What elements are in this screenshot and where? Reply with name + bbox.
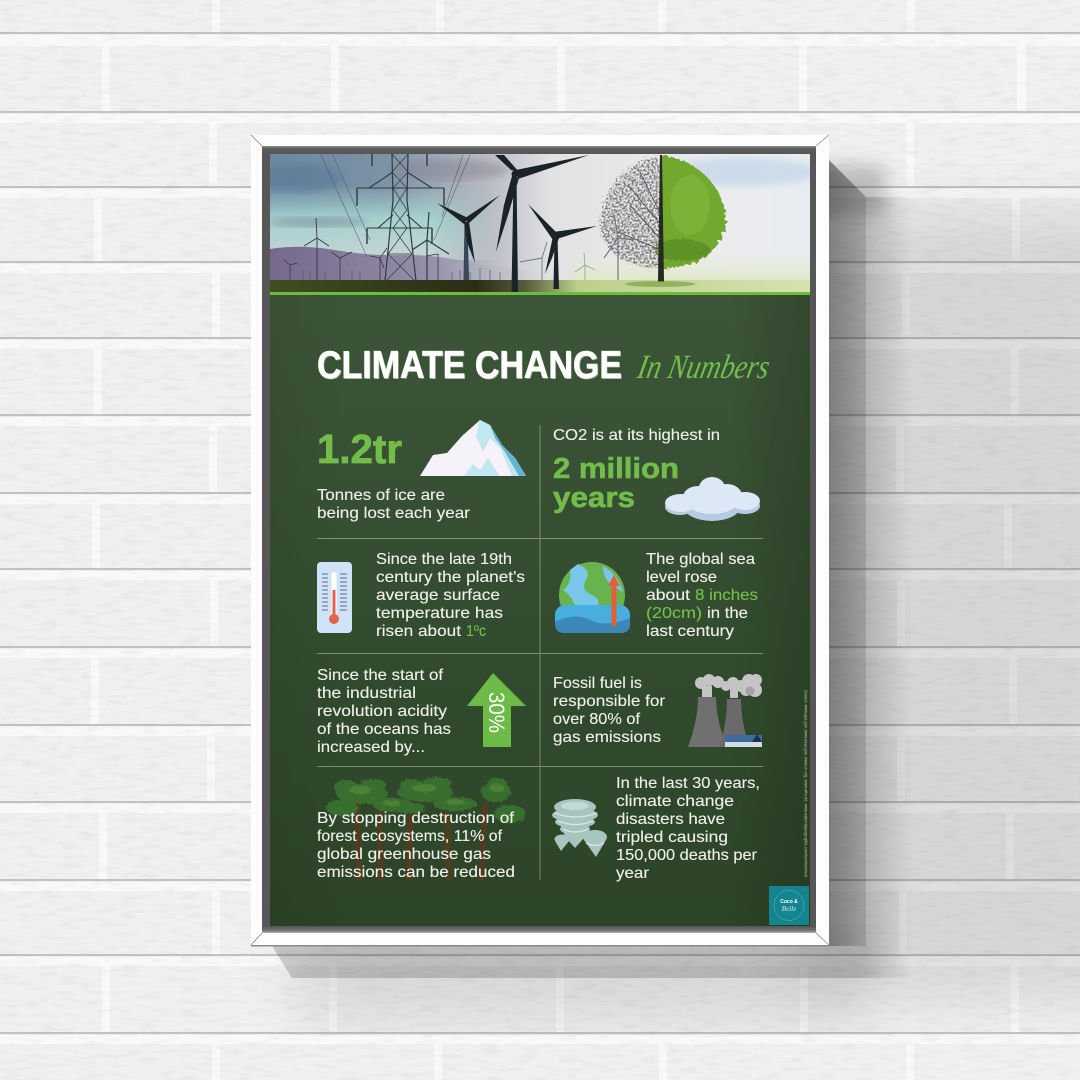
stat: sea level rise [555, 551, 758, 640]
stat: ocean acidity [317, 667, 526, 756]
stat: climate disasters: tripled causing [616, 829, 728, 846]
stat: forest ecosystems: By stopping destruction of [317, 810, 515, 827]
stat: climate disasters [552, 775, 760, 882]
icon: power plant [688, 674, 762, 747]
stat: forest ecosystems: forest ecosystems, 11% of [317, 828, 503, 845]
stat: planet temperature risen: Since the late 19th [376, 551, 512, 568]
stat: ocean acidity: revolution acidity [317, 703, 447, 720]
stat: climate disasters: 150,000 deaths per [616, 847, 757, 864]
stat: sea level rise: The global sea [646, 551, 755, 568]
background turbines [284, 212, 634, 280]
stat: 1.2tr tonnes of ice: Tonnes of ice are [317, 487, 445, 504]
stat: planet temperature risen [317, 551, 525, 640]
stat: ocean acidity: of the oceans has [317, 721, 451, 738]
stat: ocean acidity: Since the start of [317, 667, 444, 684]
logo: Coco and Belle [769, 886, 809, 925]
stat: ocean acidity: the industrial [317, 685, 416, 702]
green line under hero image [270, 292, 810, 295]
stat: ocean acidity: increased by... [317, 739, 425, 756]
stat: 1.2tr tonnes of ice: 1.2tr [317, 426, 402, 472]
stat: sea level rise: last century [646, 623, 734, 640]
stat: sea level rise: about [646, 587, 691, 604]
logo: Coco and Belle: Coco & [780, 899, 798, 905]
stat: planet temperature risen: 1ºc [466, 623, 486, 640]
stat: sea level rise: (20cm) [646, 605, 702, 622]
stat: fossil fuel [553, 674, 762, 747]
stat: forest ecosystems [317, 777, 526, 881]
main turbines [437, 155, 597, 292]
trees half bare [600, 155, 726, 287]
stat: fossil fuel: Fossil fuel is [553, 675, 642, 692]
stat: planet temperature risen: century the planet's [376, 569, 525, 586]
pylon [357, 154, 444, 281]
stat: CO2 highest in 2 million years: 2 million [553, 453, 679, 485]
stat: forest ecosystems: emissions can be reduced [317, 864, 515, 881]
icon: green up arrow 30% [467, 673, 526, 747]
stat: forest ecosystems: global greenhouse gas [317, 846, 491, 863]
stat: planet temperature risen: risen about [376, 623, 462, 640]
stat: fossil fuel: gas emissions [553, 729, 661, 746]
wires [321, 155, 470, 257]
stat: CO2 highest in 2 million years: years [553, 482, 635, 514]
icon: iceberg mountain [420, 420, 526, 476]
poster frame [251, 135, 829, 946]
stat: 1.2tr tonnes of ice: being lost each year [317, 505, 470, 522]
stat: 1.2tr tonnes of ice [317, 420, 526, 522]
stat: climate disasters: In the last 30 years, [616, 775, 760, 792]
source note: Source: www.epa.gov, www.nasa.gov, www.un.org, www.who.int, www.nationalgeographic.com/environment [804, 690, 808, 878]
stat: CO2 highest in 2 million years: CO2 is at its highest in [553, 427, 720, 444]
title: CLIMATE CHANGE [318, 345, 623, 388]
icon: forest trees [326, 777, 526, 880]
stat: sea level rise: in the [707, 605, 748, 622]
stat: sea level rise: level rose [646, 569, 717, 586]
icon: globe with rising sea [555, 562, 630, 633]
poster background [270, 154, 810, 926]
stat: planet temperature risen: temperature has [376, 605, 503, 622]
stat: sea level rise: 8 inches [695, 587, 758, 604]
icon: green up arrow 30%: 30% [484, 692, 509, 733]
logo: Coco and Belle: Belle [782, 905, 796, 913]
icon: tornadoes [552, 799, 607, 857]
icon: thermometer [317, 562, 352, 633]
grid dividers [317, 425, 763, 880]
stat: planet temperature risen: average surface [376, 587, 500, 604]
stat: fossil fuel: over 80% of [553, 711, 641, 728]
title: In Numbers [634, 348, 773, 386]
title: CLIMATE CHANGE [317, 344, 622, 387]
stat: CO2 highest in 2 million years [553, 427, 760, 521]
frame shadow on wall [272, 160, 1080, 1020]
icon: cloud [665, 477, 760, 521]
stat: climate disasters: climate change [616, 793, 734, 810]
stat: climate disasters: disasters have [616, 811, 725, 828]
stat: fossil fuel: responsible for [553, 693, 665, 710]
hero image: wind turbines, pylon and half-dead tree [258, 154, 820, 294]
stat: climate disasters: year [616, 865, 649, 882]
